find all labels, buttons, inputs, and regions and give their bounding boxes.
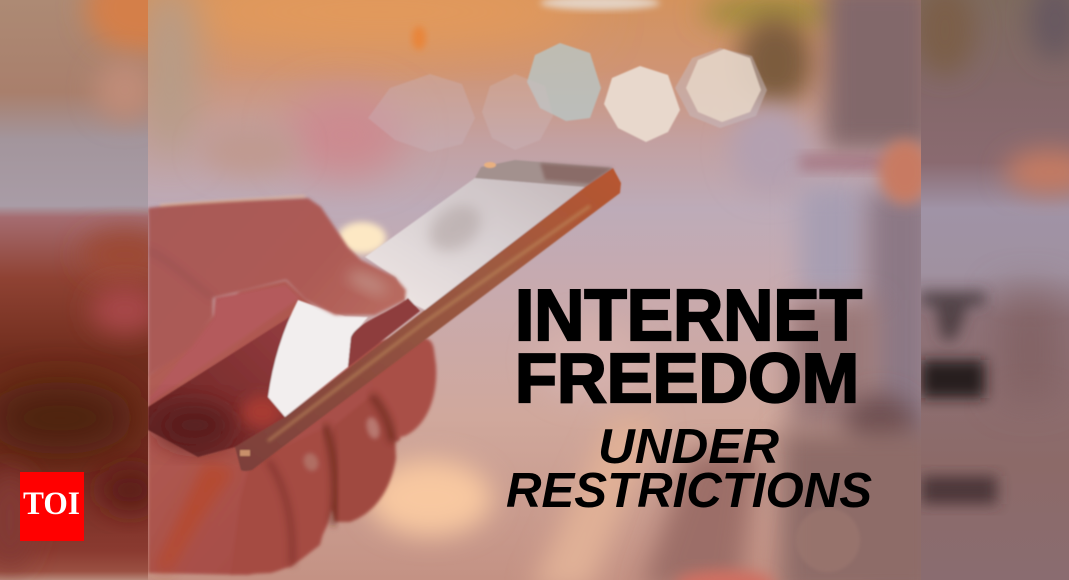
central photo [142,0,940,580]
subtitle: under restrictions: UNDER [598,420,780,474]
screen lower [268,300,368,417]
subtitle: under restrictions [506,420,872,518]
palm and back [148,280,410,575]
TOI logo [20,472,84,541]
right blurred side panel [915,0,1069,580]
phone back seen through hand [148,310,298,457]
finger three [256,455,334,575]
title block [506,276,872,518]
edge highlight [268,206,590,441]
title: internet freedom [515,276,862,417]
title: internet freedom: FREEDOM [515,339,859,417]
hand [148,280,436,575]
blurred street background [142,0,940,580]
inner thumb-base pink area [158,288,298,395]
thumb behind screen [348,298,420,367]
title: internet freedom: INTERNET [515,276,862,356]
left blurred side panel [0,0,148,580]
screen upper [365,178,585,310]
finger two [330,406,398,524]
phone edge [235,168,621,471]
lower orange streak [155,462,235,570]
bokeh lights [368,43,767,152]
smartphone [148,160,621,471]
fingernails [364,416,382,440]
finger behind phone upper [398,338,438,438]
subtitle: under restrictions: RESTRICTIONS [506,464,872,518]
index finger [148,196,406,377]
TOI logo: TOI [23,486,80,522]
top glass [475,160,613,187]
corner buttons [240,450,250,456]
headlight glow behind phone [338,222,386,254]
finger shadows [268,460,292,565]
